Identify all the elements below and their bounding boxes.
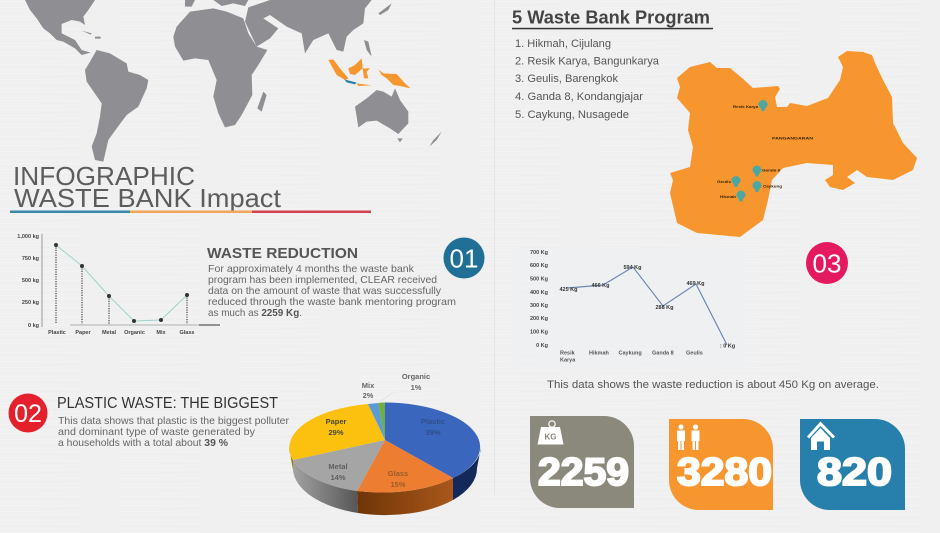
list of waste banks: 2. Resik Karya, Bangunkarya — [515, 56, 660, 68]
text: waste reduction: reduced through the waste bank mentoring program — [208, 296, 456, 308]
text: plastic waste: and dominant type of waste generated by — [58, 426, 256, 438]
line chart: waste by type: Plastic — [48, 330, 66, 336]
line chart: waste by type: Glass — [180, 330, 194, 336]
badge 03: 03 — [813, 248, 841, 278]
line chart: reduction per bank: 594 Kg — [623, 265, 642, 271]
line chart: reduction per bank: Ganda 8 — [652, 350, 674, 356]
pie chart: waste types — [289, 372, 481, 515]
pie chart: waste types: 29% — [328, 428, 344, 437]
pie chart: waste types: Glass — [388, 469, 408, 478]
stat card: households — [800, 419, 905, 510]
line chart: reduction per bank: Caykung — [618, 350, 642, 356]
text: waste reduction: For approximately 4 months the waste bank — [208, 263, 415, 275]
highlighted Indonesia — [328, 58, 411, 88]
line chart: waste by type: Metal — [102, 330, 116, 336]
text: waste reduction — [208, 263, 456, 319]
line chart: reduction per bank: 300 Kg — [530, 303, 548, 309]
pie chart: waste types: 1% — [411, 383, 422, 392]
badge 01 — [444, 238, 484, 278]
text: plastic waste — [58, 415, 290, 449]
line chart: waste by type: 500 kg — [22, 278, 39, 284]
pie chart: waste types: Metal — [328, 462, 348, 471]
map pins — [732, 100, 768, 202]
stat card: kilograms: 2259 — [538, 451, 629, 494]
line chart: reduction per bank: 400 Kg — [530, 290, 548, 296]
line chart: waste by type: 750 kg — [22, 256, 39, 262]
line chart: waste by type: 0 kg — [28, 323, 39, 329]
stat card: people: 3280 — [677, 451, 772, 494]
map labels: Ganda 8 — [762, 168, 781, 172]
line chart: waste by type: 250 kg — [22, 300, 39, 306]
line chart: reduction per bank: Karya — [560, 358, 576, 364]
stat card: kilograms — [530, 416, 634, 508]
text: waste reduction: program has been implemented, CLEAR received — [208, 274, 437, 286]
line chart: reduction per bank: 100 Kg — [530, 330, 548, 336]
badge 02 — [8, 394, 48, 432]
list of waste banks — [515, 38, 660, 121]
map labels — [717, 104, 813, 199]
line chart: reduction per bank: 600 Kg — [530, 263, 548, 269]
line chart: waste by type — [17, 234, 220, 336]
map: Pangandaran — [670, 51, 917, 237]
text: waste reduction: data on the amount of waste that was successfully — [208, 285, 442, 297]
line chart: reduction per bank — [530, 250, 735, 364]
pie chart: waste types: 39% — [425, 428, 441, 437]
text: waste reduction: as much as 2259 Kg. — [208, 307, 302, 319]
line chart: reduction per bank: 469 Kg — [686, 281, 705, 287]
line chart: reduction per bank: Geulis — [686, 350, 703, 356]
pie chart: waste types: 14% — [330, 473, 346, 482]
stat card: households: 820 — [817, 451, 892, 494]
list of waste banks: 1. Hikmah, Cijulang — [515, 38, 611, 50]
pie chart: waste types: 15% — [390, 480, 406, 489]
map labels: Geulis — [717, 179, 732, 184]
title: INFOGRAPHIC — [13, 161, 195, 191]
list of waste banks: 3. Geulis, Barengkok — [515, 73, 618, 85]
badge 03 — [806, 242, 848, 284]
pie chart: waste types: 2% — [363, 391, 374, 400]
line chart: reduction per bank: 466 Kg — [591, 283, 610, 289]
map labels: Resik Karya — [733, 104, 759, 109]
line chart: reduction per bank: 288 Kg — [655, 305, 674, 311]
stat card: people — [669, 419, 773, 510]
line chart: reduction per bank: Hikmah — [589, 350, 610, 356]
pie chart: waste types: Mix — [362, 381, 375, 390]
line chart: reduction per bank: 200 Kg — [530, 316, 548, 322]
map labels: PANGANDARAN — [772, 136, 813, 140]
world map — [25, 0, 442, 162]
icon: weight: KG — [544, 432, 556, 442]
line chart: reduction per bank: Resik — [560, 350, 576, 356]
line chart: reduction per bank: : 0 Kg — [720, 344, 735, 350]
heading: 5 waste bank program: 5 Waste Bank Program — [512, 8, 710, 28]
line chart: waste by type: 1,000 kg — [17, 234, 39, 240]
pie chart: waste types: Paper — [326, 417, 346, 426]
text: average reduction: This data shows the waste reduction is about 450 Kg on average. — [547, 379, 879, 391]
line chart: reduction per bank: 500 Kg — [530, 276, 548, 282]
pie chart: waste types: Organic — [402, 372, 430, 381]
line chart: waste by type: Organic — [124, 330, 145, 336]
heading: plastic waste: PLASTIC WASTE: THE BIGGEST — [57, 395, 278, 412]
line chart: reduction per bank: 0 Kg — [536, 343, 548, 349]
list of waste banks: 4. Ganda 8, Kondangjajar — [515, 91, 643, 103]
title: WASTE BANK Impact — [14, 183, 282, 213]
pie chart: waste types: Plastic — [421, 417, 445, 426]
map labels: Hikmah — [720, 194, 737, 199]
badge 01: 01 — [450, 244, 478, 274]
map labels: Caykung — [763, 184, 783, 188]
icon: people — [677, 424, 700, 450]
line chart: waste by type: Mix — [156, 330, 167, 336]
heading: waste reduction: WASTE REDUCTION — [207, 245, 358, 262]
text: plastic waste: This data shows that plastic is the biggest polluter — [58, 415, 290, 427]
line chart: waste by type: Paper — [75, 330, 91, 336]
line chart: reduction per bank: 425 Kg — [559, 287, 578, 293]
text: plastic waste: a households with a total about 39 % — [58, 437, 229, 449]
list of waste banks: 5. Caykung, Nusagede — [515, 109, 629, 121]
badge 02: 02 — [14, 400, 42, 428]
title — [10, 161, 371, 213]
line chart: reduction per bank: 700 Kg — [530, 250, 548, 256]
icon: house — [807, 422, 835, 450]
